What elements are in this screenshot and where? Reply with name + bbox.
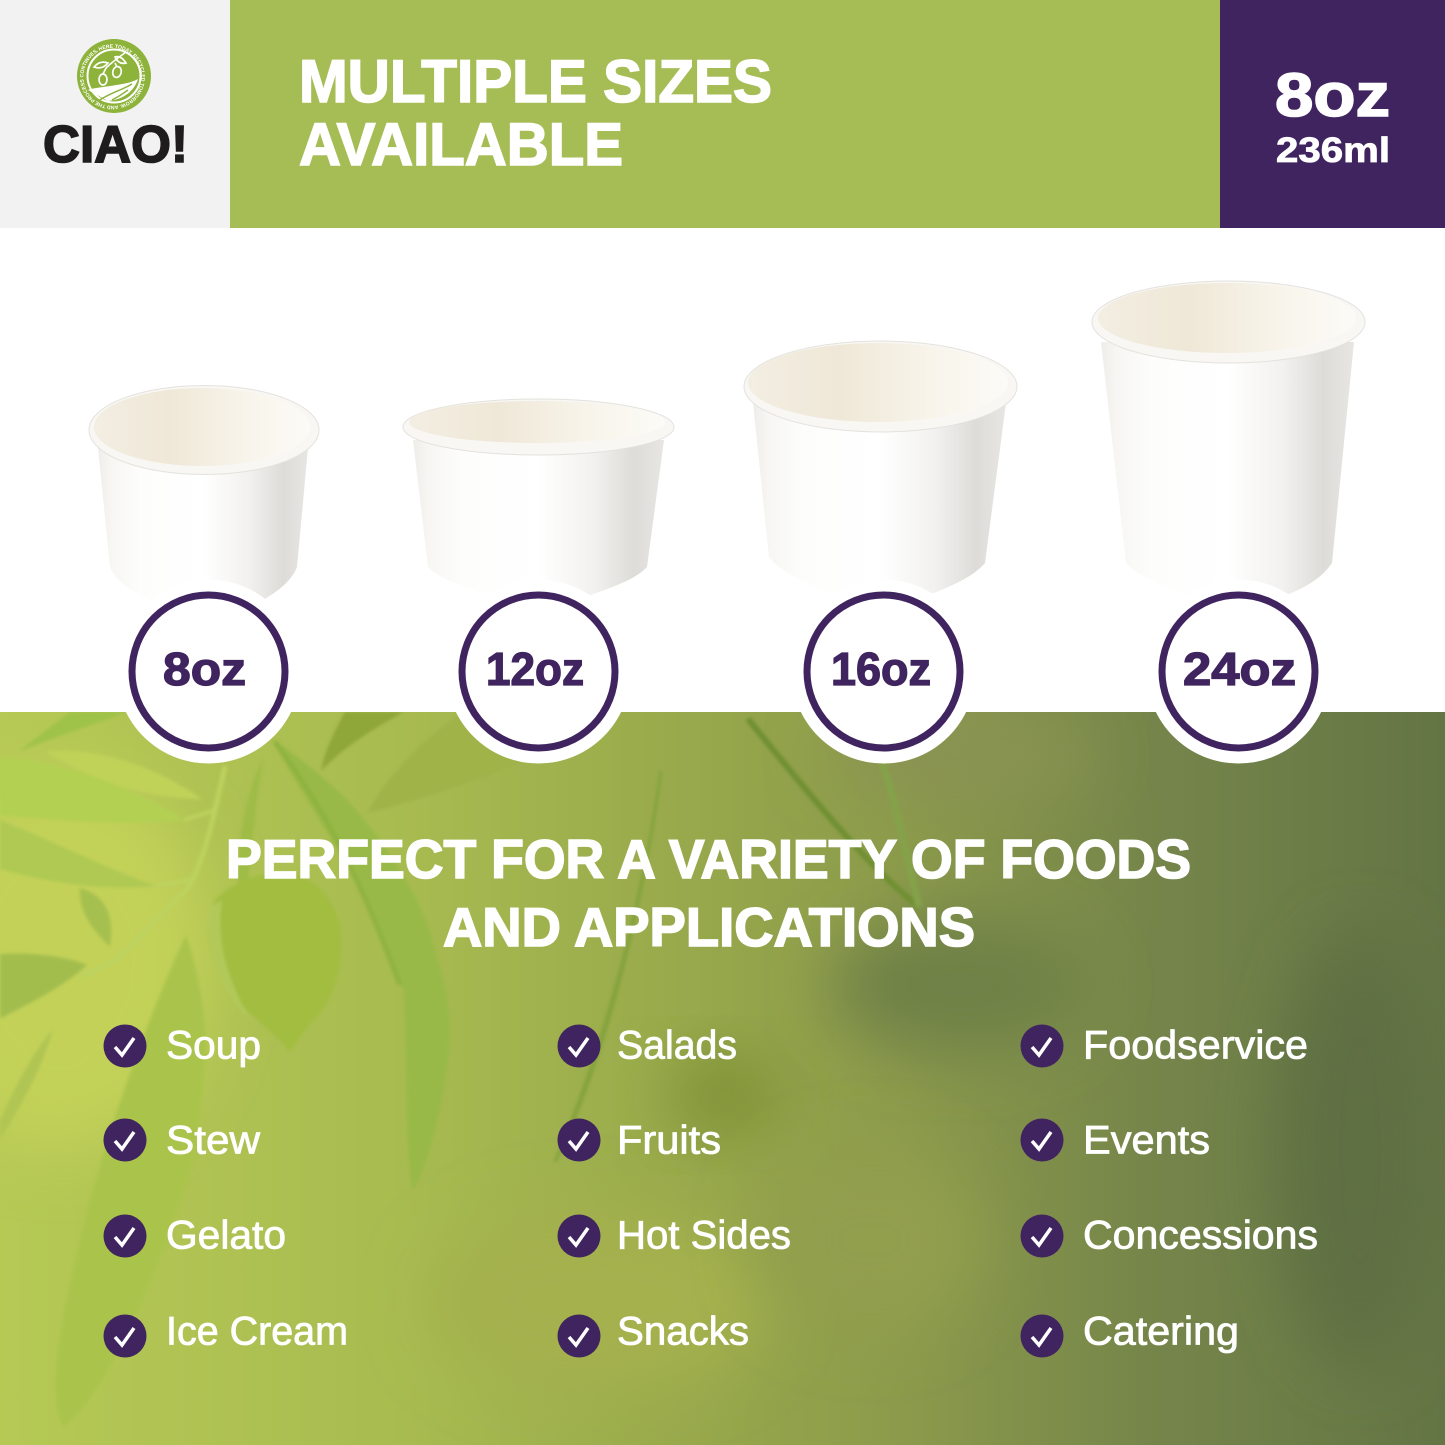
wordmark: CIAO!: CIAO! [43,116,188,174]
size badge: 12oz: 12oz [486,643,584,695]
list item: Catering: Catering [1083,1310,1239,1354]
list item: Catering [1020,1310,1239,1358]
list item: Events [1020,1118,1210,1162]
heading: perfect for a variety of foods and applications: AND APPLICATIONS [443,896,975,958]
list column: venues [1020,1024,1318,1358]
text: 8oz: 8oz [1275,61,1390,129]
list item: Concessions: Concessions [1083,1214,1318,1258]
list item: Foodservice: Foodservice [1083,1024,1308,1068]
panel: logo block [0,0,230,228]
list item: Soup: Soup [166,1024,261,1068]
list item: Snacks: Snacks [617,1310,749,1354]
size badge: 12oz [446,580,630,764]
panel: green foliage background [0,712,1445,1445]
size badge: 24oz [1146,580,1330,764]
list column: foods [104,1024,348,1358]
panel: purple size badge [1220,0,1445,228]
text: 236ml: 236ml [1276,131,1390,170]
heading: multiple sizes available: MULTIPLE SIZES [299,48,772,115]
list item: Fruits [558,1118,721,1162]
panel: green header band [230,0,1220,228]
icon: round olive logo badge: HERE TODAY, RECYCLED TOMORROW. AND THE PROCESS CONTINUES. [80,44,145,110]
list item: Stew: Stew [166,1118,260,1162]
size badge: 8oz: 8oz [163,643,246,695]
heading: perfect for a variety of foods and applications: PERFECT FOR A VARIETY OF FOODS [226,828,1191,890]
list item: Soup [104,1024,261,1068]
list item: Stew [104,1118,260,1162]
list item: Gelato [104,1214,286,1258]
size badge: 16oz: 16oz [831,643,931,695]
list item: Ice Cream: Ice Cream [166,1310,348,1354]
list item: Salads [558,1024,737,1068]
cup: 24oz [1092,281,1365,596]
cup: 12oz [403,399,674,596]
list item: Fruits: Fruits [617,1118,721,1162]
cup: 16oz [744,341,1017,594]
heading: multiple sizes available: AVAILABLE [299,111,623,178]
list item: Snacks [558,1310,749,1358]
heading: perfect for a variety of foods and applications [226,828,1191,958]
list item: Events: Events [1083,1118,1210,1162]
size badge: 24oz: 24oz [1183,643,1296,695]
list column: dishes [558,1024,791,1358]
list item: Salads: Salads [617,1024,737,1068]
size badge: 8oz [116,580,300,764]
cup: 8oz [89,386,319,600]
list item: Hot Sides: Hot Sides [617,1214,791,1258]
heading: multiple sizes available [299,48,772,178]
list item: Gelato: Gelato [166,1214,286,1258]
list item: Ice Cream [104,1310,348,1358]
size badge: 16oz [792,580,976,764]
